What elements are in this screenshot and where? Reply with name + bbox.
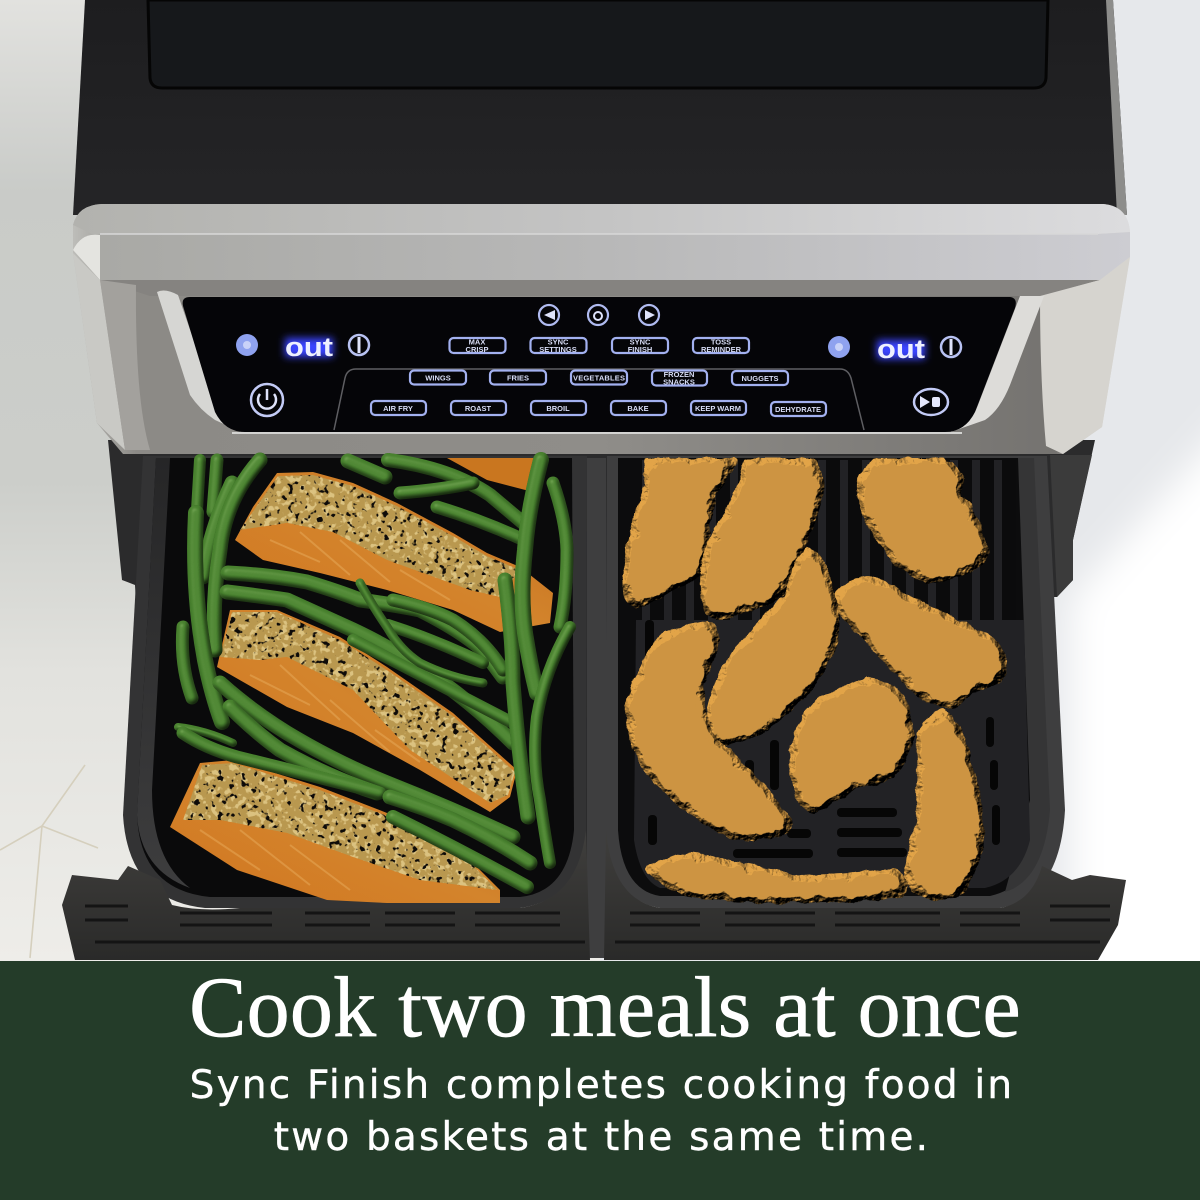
function buttons row 1: CRISP — [466, 345, 488, 354]
function buttons row 1: REMINDER — [701, 345, 742, 354]
green beans — [178, 460, 570, 887]
left display: out — [285, 332, 333, 362]
left display — [236, 332, 369, 362]
preset buttons row 2: FRIES — [507, 374, 529, 382]
drawer body under the band — [108, 440, 1095, 870]
salmon 4 partial — [447, 458, 538, 493]
preset buttons row 2: VEGETABLES — [573, 374, 625, 382]
start pause button — [914, 389, 948, 415]
salmon 1 — [235, 472, 553, 632]
control panel — [183, 297, 1016, 432]
left basket — [123, 456, 587, 908]
function buttons row 3: BAKE — [627, 404, 649, 413]
preset buttons row 2: NUGGETS — [741, 374, 779, 383]
preset buttons row 2 — [410, 370, 788, 386]
caption banner — [0, 961, 1200, 1200]
preset buttons row 2: SNACKS — [663, 378, 695, 386]
chicken tenders — [626, 462, 1003, 899]
banner description: Sync Finish completes cooking food in — [190, 1062, 1014, 1108]
panel lips — [157, 291, 246, 434]
salmon 3 — [170, 760, 500, 903]
right display — [828, 334, 961, 364]
function buttons row 3: ROAST — [465, 404, 492, 413]
banner description: two baskets at the same time. — [274, 1114, 930, 1160]
function buttons row 3 — [371, 401, 826, 416]
salmon 2 — [217, 610, 517, 812]
function buttons row 1: FINISH — [628, 345, 652, 354]
function buttons row 1: TOSS — [711, 338, 731, 346]
preset buttons row 2: WINGS — [425, 374, 451, 382]
right display: out — [877, 334, 925, 364]
function buttons row 3: BROIL — [546, 404, 570, 413]
air fryer top housing — [73, 0, 1127, 215]
right basket with crisper grate — [605, 456, 1065, 908]
banner heading: Cook two meals at once — [189, 959, 1021, 1055]
navigation icons — [539, 305, 659, 325]
banner description — [190, 1062, 1014, 1160]
function buttons row 1: MAX — [469, 338, 485, 346]
function buttons row 1: SYNC — [630, 338, 651, 346]
function buttons row 1: SETTINGS — [539, 345, 577, 354]
recessed top window — [148, 0, 1048, 88]
preset buttons row 2: FROZEN — [664, 370, 694, 379]
power button — [251, 384, 283, 416]
function buttons row 1: SYNC — [548, 338, 569, 346]
salmon fillets — [170, 458, 553, 903]
function buttons row 1 — [450, 338, 749, 354]
function buttons row 3: AIR FRY — [383, 404, 413, 413]
function buttons row 3: DEHYDRATE — [775, 405, 821, 414]
basket handles — [62, 830, 1126, 960]
divider between baskets — [587, 458, 606, 958]
function buttons row 3: KEEP WARM — [695, 404, 741, 413]
stainless steel front band — [73, 204, 1130, 454]
